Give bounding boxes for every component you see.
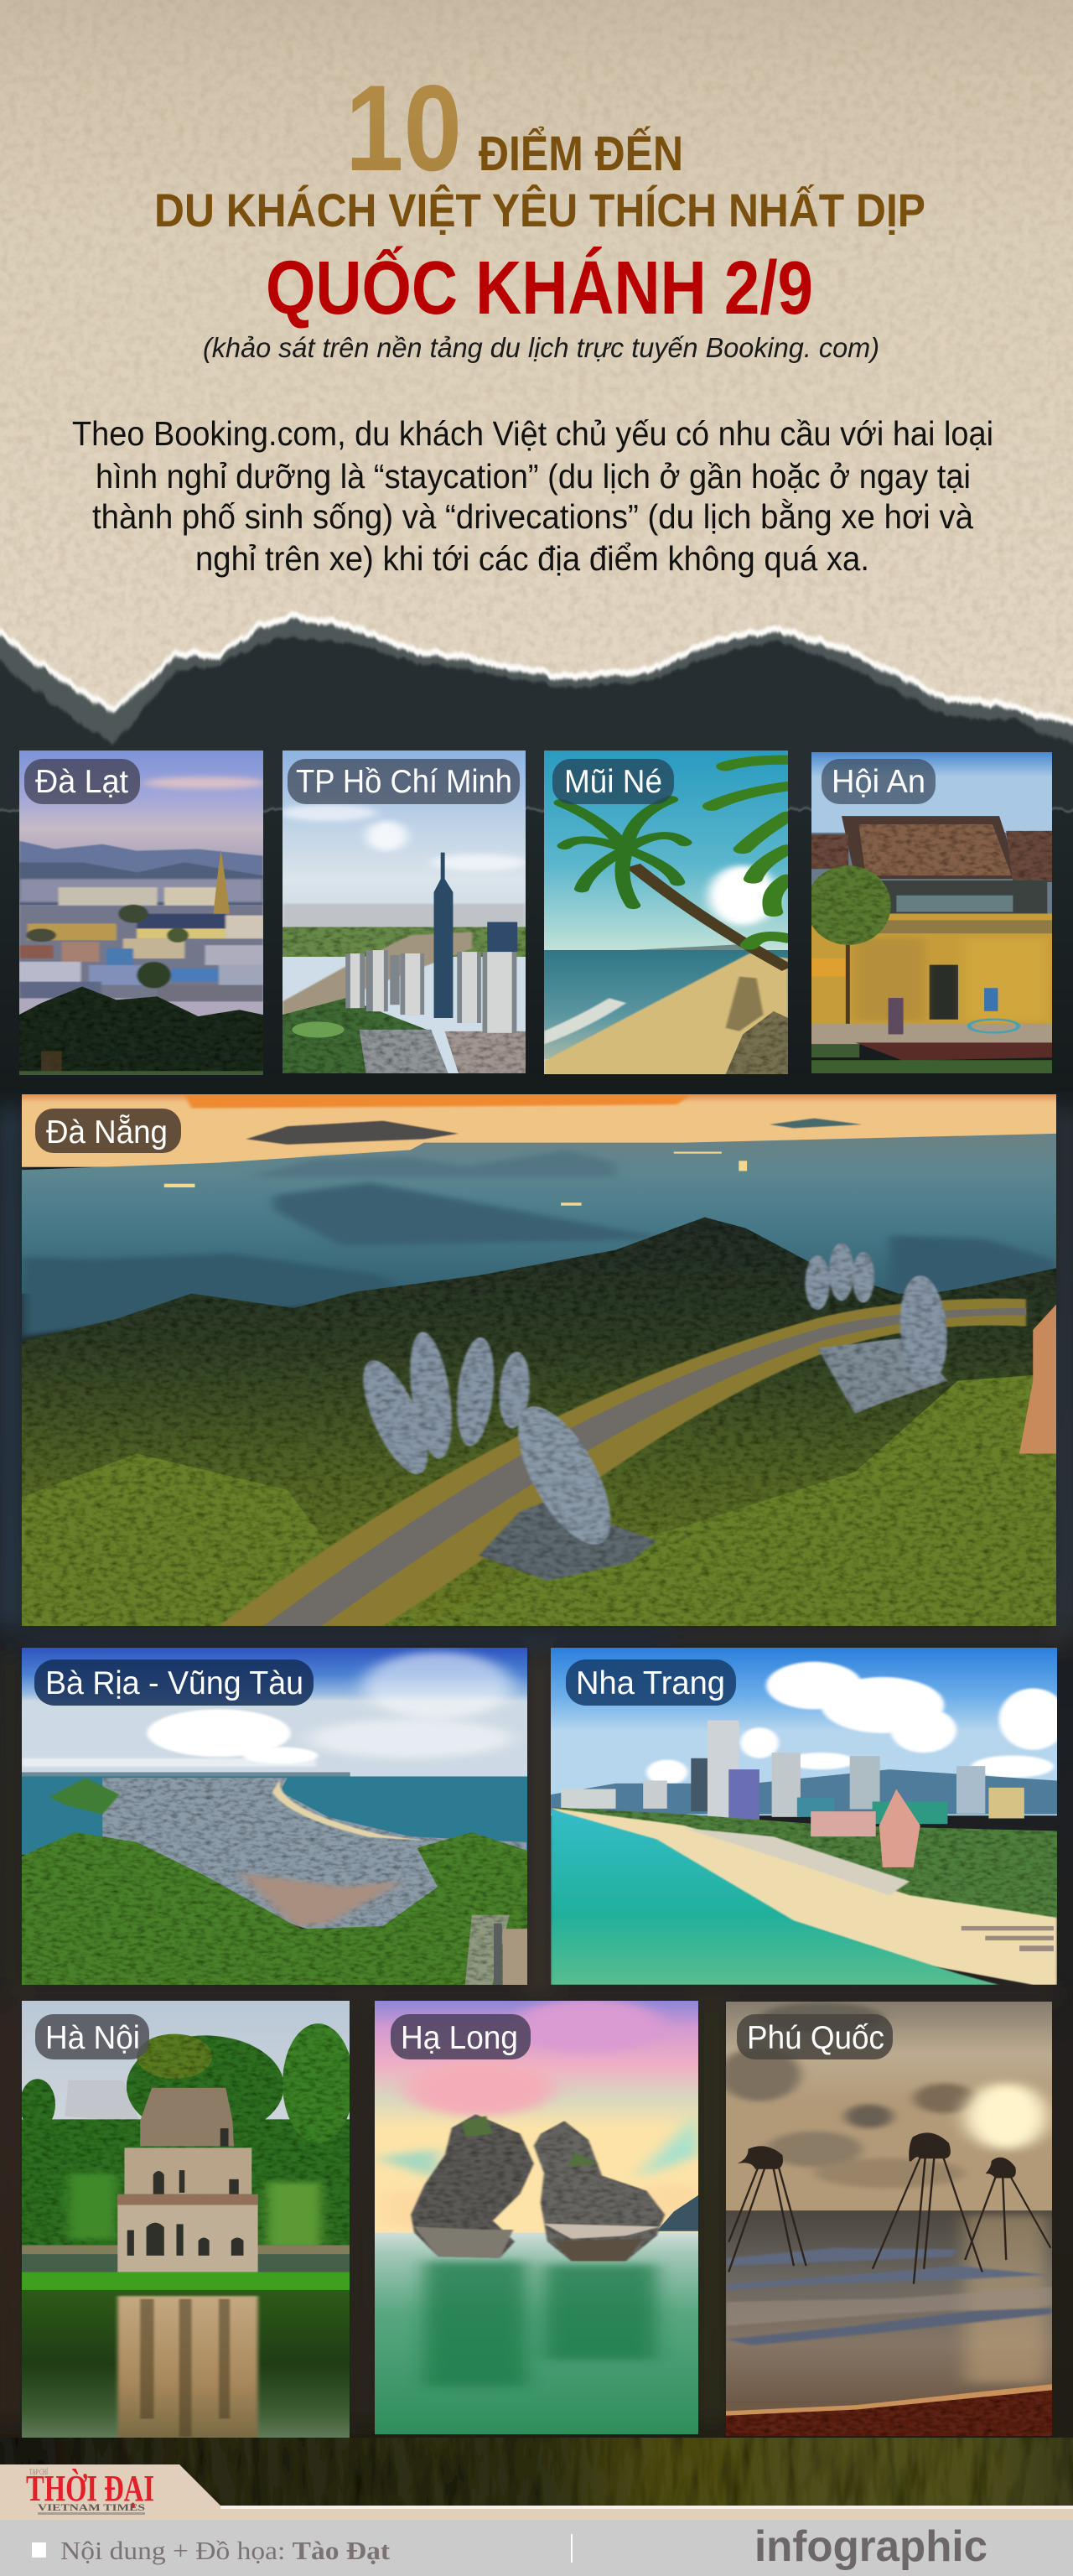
label text: Mui Ne: Mũi Né <box>564 764 662 800</box>
label pill: Ha Long <box>391 2014 531 2059</box>
label text: Nha Trang: Nha Trang <box>576 1665 725 1701</box>
intro paragraph: Theo Booking.com, du khách Việt chủ yếu có nhu cầu với hai loại <box>72 414 993 453</box>
label pill: Ba Ria Vung Tau <box>34 1659 314 1706</box>
photo card: Da Nang <box>22 1094 1056 1626</box>
label pill: Da Nang <box>35 1109 181 1153</box>
label text: Phu Quoc: Phú Quốc <box>747 2020 884 2056</box>
logo: Thoi Dai Vietnam Times: THỜI ĐẠI <box>26 2468 154 2509</box>
intro paragraph: hình nghỉ dưỡng là “staycation” (du lịch ở gần hoặc ở ngay tại <box>96 457 971 496</box>
label text: Ha Long: Hạ Long <box>401 2020 518 2056</box>
logo: Thoi Dai Vietnam Times: TẠP CHÍ <box>29 2468 48 2476</box>
photo card: Da Lat <box>19 750 267 1075</box>
logo: Thoi Dai Vietnam Times <box>26 2468 154 2515</box>
logo: Thoi Dai Vietnam Times: VIETNAM TIMES <box>38 2501 145 2513</box>
dark lower background <box>0 797 1073 2576</box>
label pill: Nha Trang <box>566 1659 736 1706</box>
title: diem den: ĐIỂM ĐẾN <box>479 127 683 181</box>
label pill: TP Ho Chi Minh <box>288 759 520 804</box>
photo card: Ha Long <box>375 1999 698 2434</box>
label pill: Hoi An <box>822 759 936 804</box>
photo card: Phu Quoc <box>718 2002 1052 2436</box>
label text: Ha Noi: Hà Nội <box>45 2020 140 2056</box>
label pill: Phu Quoc <box>737 2014 893 2059</box>
label pill: Mui Ne <box>552 759 674 804</box>
infographic wordmark: infographic <box>754 2522 987 2571</box>
label text: Ba Ria Vung Tau: Bà Rịa - Vũng Tàu <box>45 1665 303 1701</box>
footer credit: Nội dung + Đồ họa: Tào Đạt <box>60 2536 391 2565</box>
footer divider <box>571 2534 573 2563</box>
intro paragraph: thành phố sinh sống) và “drivecations” (du lịch bằng xe hơi và <box>92 497 973 536</box>
label text: Da Lat: Đà Lạt <box>35 764 128 800</box>
footer band <box>0 2464 1073 2576</box>
intro paragraph <box>72 414 993 578</box>
label text: TP Ho Chi Minh: TP Hồ Chí Minh <box>296 764 512 800</box>
label text: Da Nang: Đà Nẵng <box>46 1114 168 1150</box>
torn mountain edge <box>0 613 1073 809</box>
footer bullet <box>32 2542 46 2558</box>
title: number 10: 10 <box>345 60 462 196</box>
photo card: Nha Trang <box>551 1648 1067 1985</box>
subtitle: (khảo sát trên nền tảng du lịch trực tuyến Booking. com) <box>203 332 879 363</box>
parchment background <box>0 0 1073 805</box>
intro paragraph: nghỉ trên xe) khi tới các địa điểm không quá xa. <box>195 539 869 578</box>
photo card: Mui Ne <box>544 750 788 1075</box>
photo card: TP Ho Chi Minh <box>281 750 527 1073</box>
photo card: Ha Noi <box>20 2001 354 2438</box>
label text: Hoi An: Hội An <box>832 764 925 800</box>
photo card: Ba Ria Vung Tau <box>22 1648 527 1985</box>
title: quoc khanh: QUỐC KHÁNH 2/9 <box>266 245 813 330</box>
label pill: Ha Noi <box>35 2014 149 2059</box>
title: du khach viet: DU KHÁCH VIỆT YÊU THÍCH NHẤT DỊP <box>154 184 925 236</box>
photo card: Hoi An <box>806 752 1052 1073</box>
label pill: Da Lat <box>24 759 140 804</box>
